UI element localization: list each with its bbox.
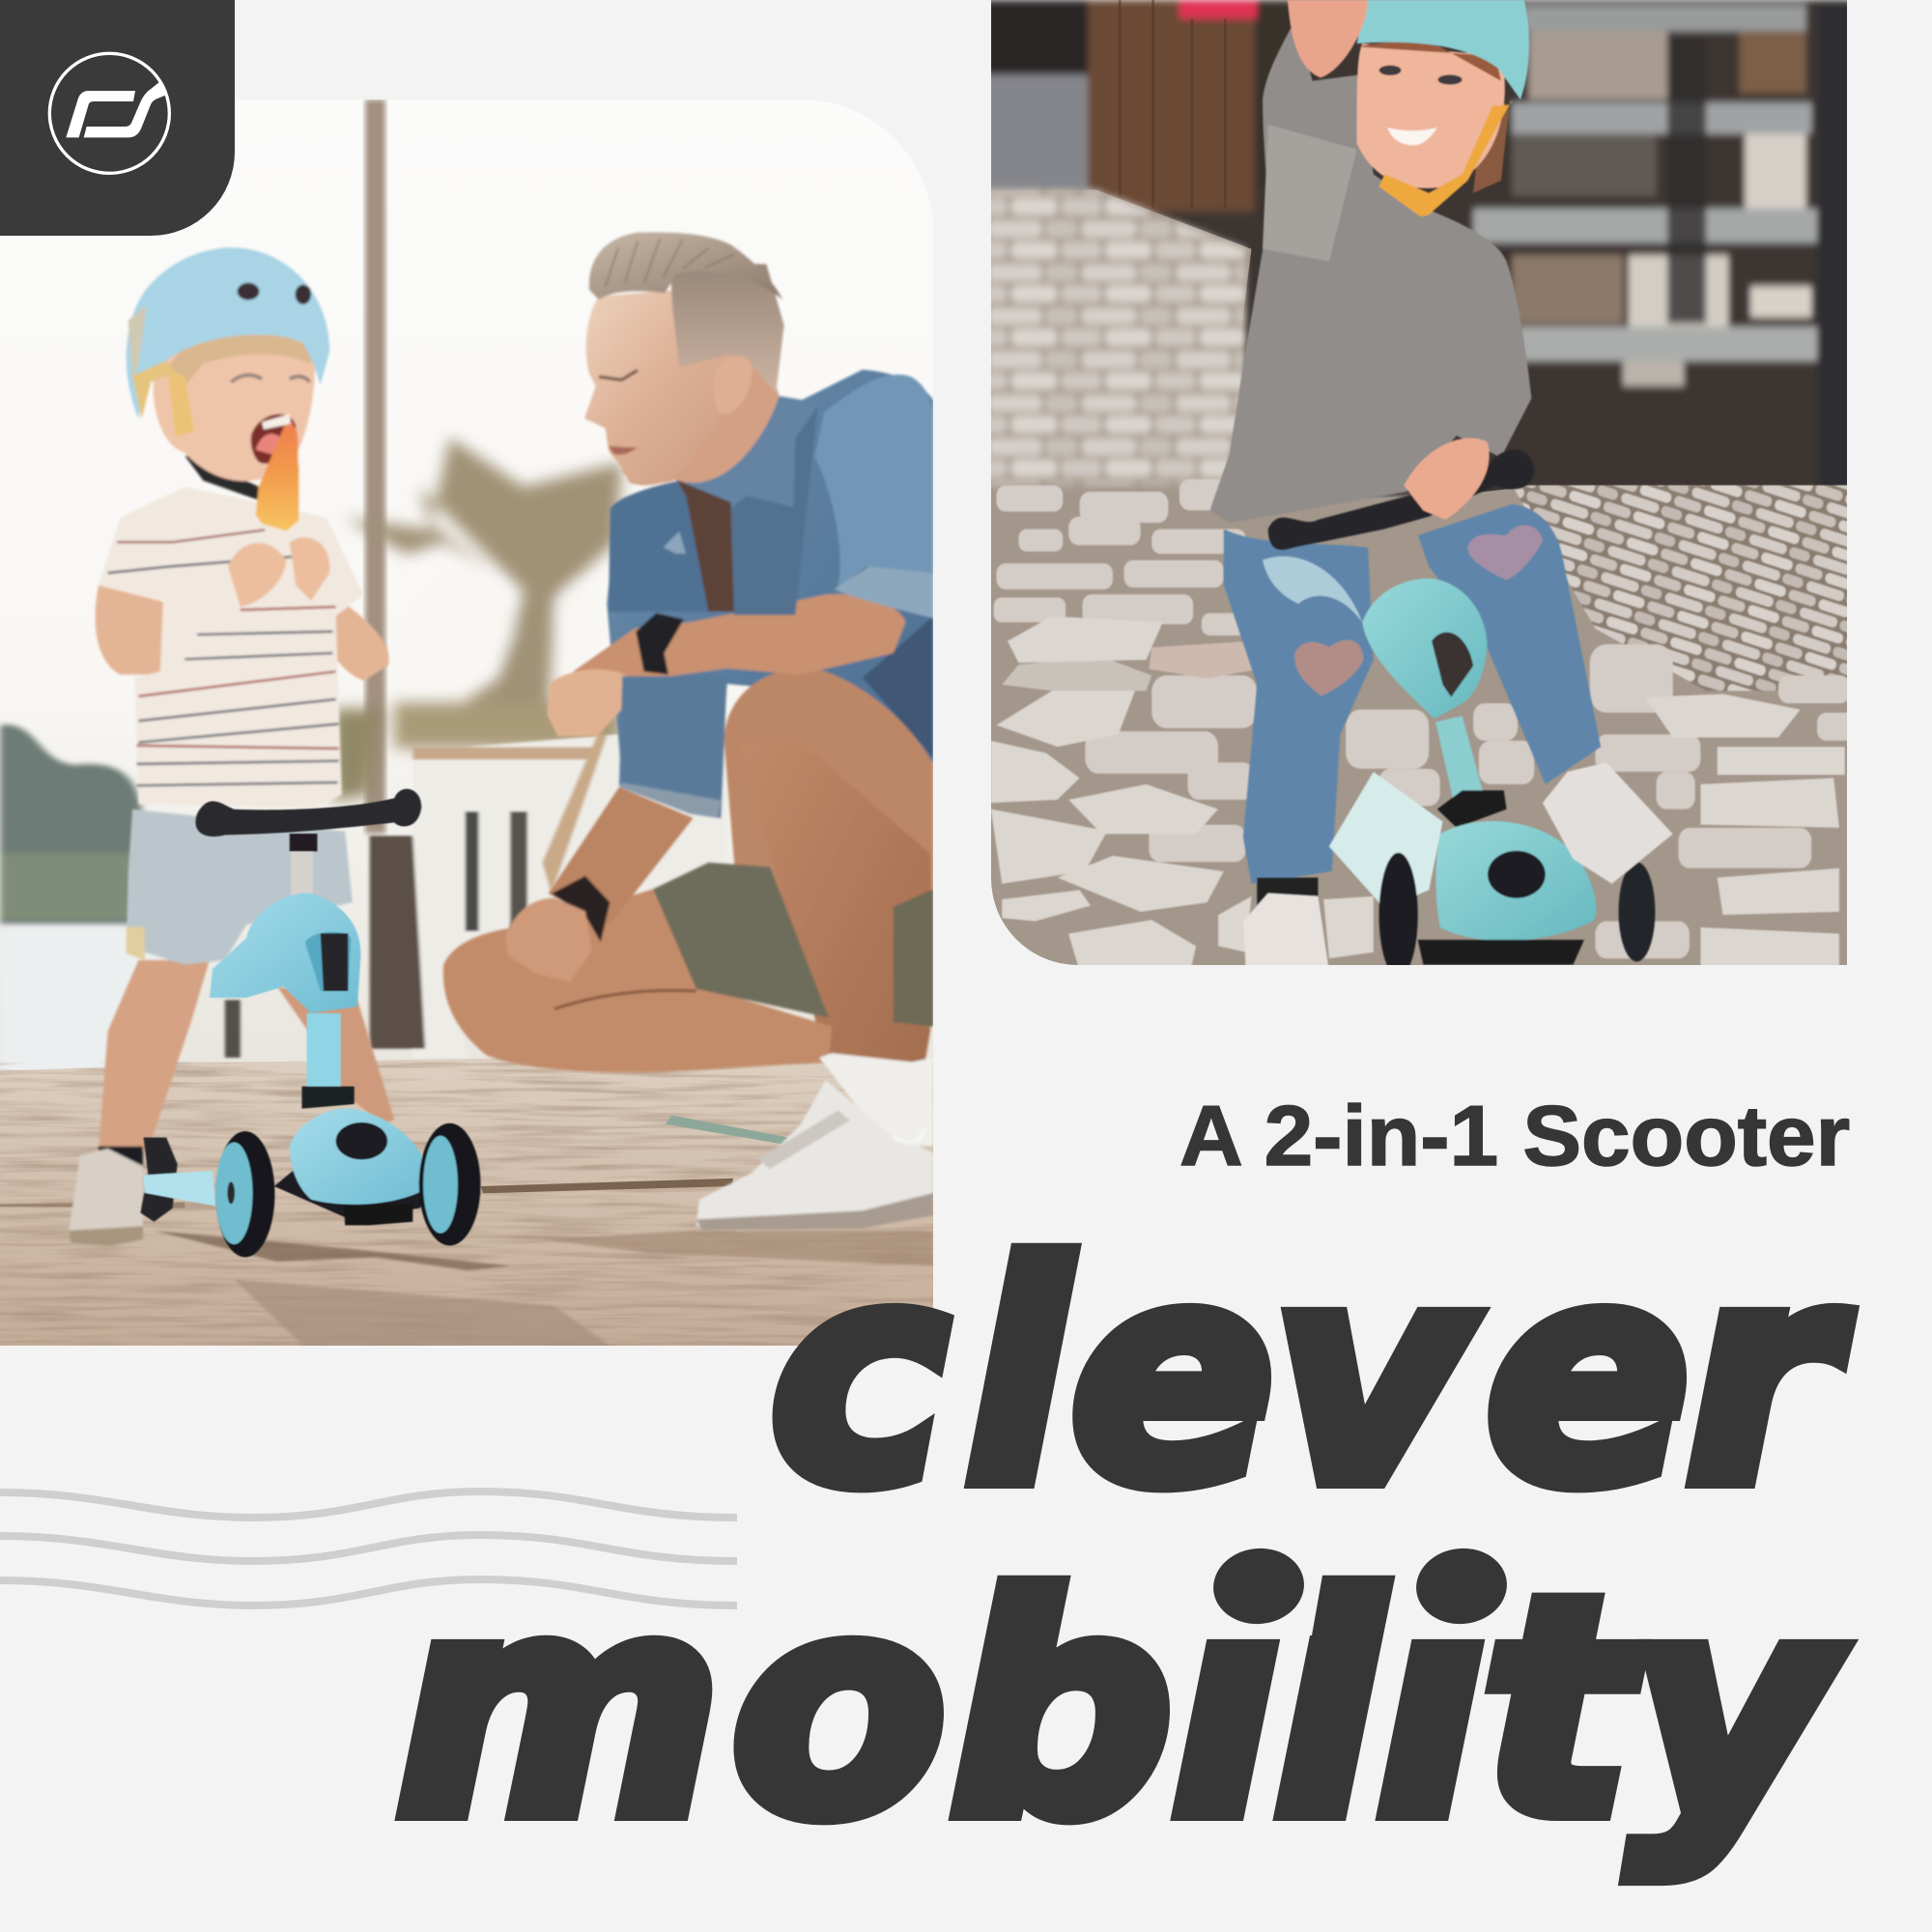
child [69, 247, 394, 1246]
logo mark [49, 53, 169, 173]
photo: father and son with scooter on a boardwalk [0, 99, 936, 1350]
subtitle: A 2-in-1 Scooter [1179, 1088, 1850, 1183]
man's head and shirt collar [584, 232, 933, 618]
i dots [1209, 1544, 1511, 1629]
cobblestones [985, 190, 1872, 976]
headline: clever: clever [770, 1202, 1850, 1551]
man [443, 232, 933, 1231]
girl [1209, 0, 1673, 978]
headline: mobility: mobility [396, 1533, 1843, 1884]
blurred background: post, palm and planter [225, 99, 727, 1058]
scooter: blue [140, 789, 480, 1257]
wooden deck [0, 1058, 936, 1350]
photo: smiling girl on a scooter on cobblestones [985, 0, 1872, 978]
decorative waves [0, 1492, 737, 1605]
logo badge [0, 0, 235, 236]
background: street, planter and stairs [985, 0, 1872, 497]
